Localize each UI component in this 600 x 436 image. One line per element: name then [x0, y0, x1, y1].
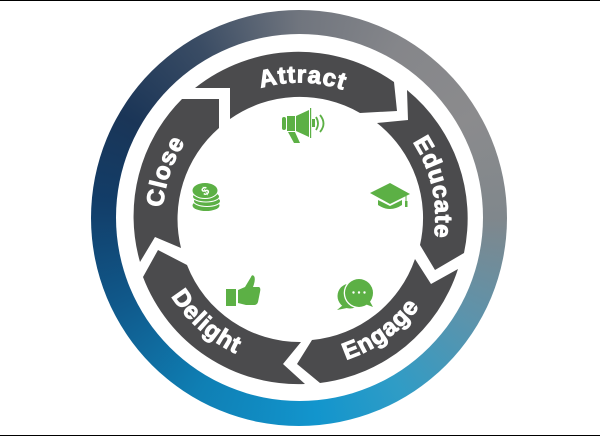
- gradient outer ring: [91, 10, 507, 426]
- bottom border line: [0, 435, 600, 436]
- top border line: [0, 0, 600, 1]
- segment: Delight: Delight: [171, 287, 242, 354]
- icon: thumbs up: [226, 275, 260, 306]
- icon: graduation cap: [370, 183, 410, 209]
- icon: megaphone: [282, 108, 324, 143]
- segment: Close: Close: [146, 138, 184, 206]
- icon: chat bubbles: [337, 278, 374, 310]
- segment: Engage: Engage: [340, 301, 418, 360]
- segment: Engage: [297, 259, 458, 383]
- segment: Educate: [377, 90, 468, 270]
- segment: Attract: [195, 52, 397, 119]
- segment: Educate: Educate: [413, 134, 452, 238]
- ring inner white disc: [116, 34, 482, 401]
- icon: coin stack: [192, 182, 220, 211]
- segment: Attract: Attract: [260, 66, 347, 90]
- icon: coin stack: $: [199, 183, 212, 199]
- segment: Delight: [143, 250, 305, 384]
- segment: Close: [134, 99, 219, 262]
